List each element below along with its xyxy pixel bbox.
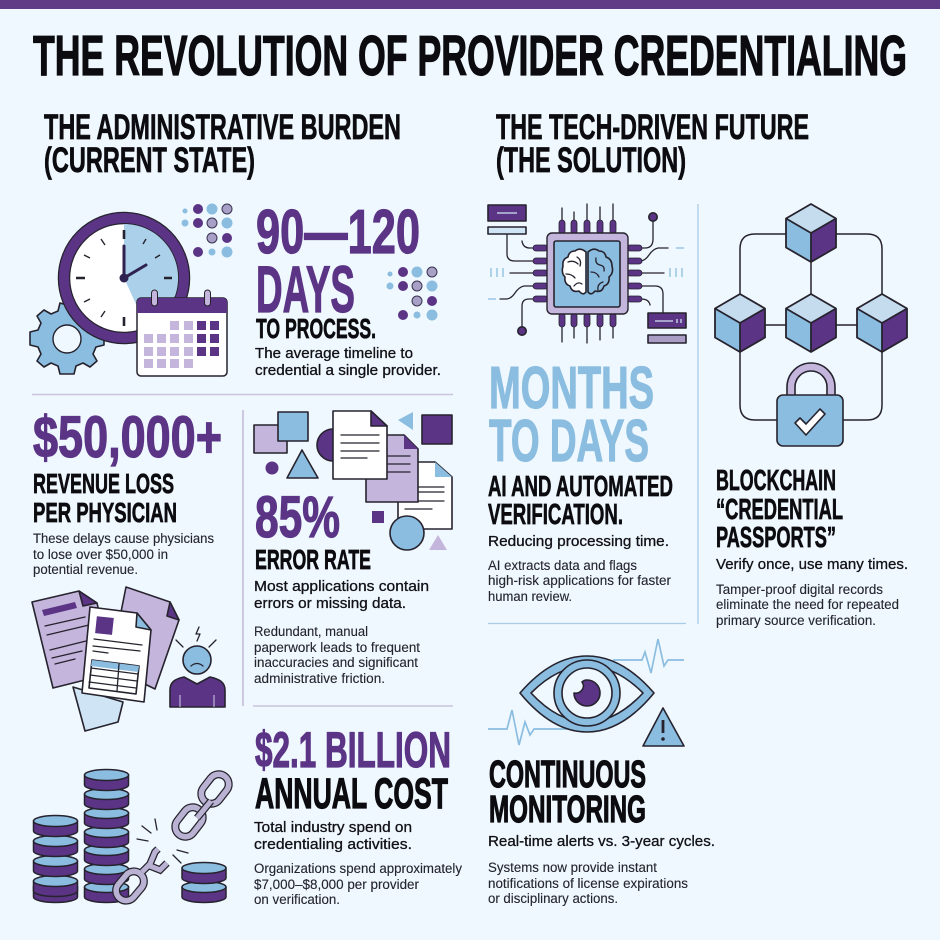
icon: AI chip with brain [488,204,686,343]
heading: the tech-driven future: (THE SOLUTION) [496,141,686,180]
stat: months to days [489,355,654,474]
stat: 90-120 days: TO PROCESS. [256,313,376,344]
top banner bar [0,0,940,9]
stat: $50,000+ revenue loss: REVENUE LOSS [33,468,174,499]
icon: dot cluster lower [386,266,438,320]
heading: the tech-driven future [496,108,809,180]
stat: 90-120 days: The average timeline to [255,346,413,362]
stat: 85% error rate: errors or missing data. [254,596,406,612]
heading: the administrative burden: THE ADMINISTRATIVE BURDEN [44,108,401,147]
text: AI and automated verification: VERIFICATION. [488,499,623,531]
brain [562,249,613,294]
text: AI and automated verification: high-risk applications for faster [488,573,671,588]
text: continuous monitoring: or disciplinary actions. [488,891,618,906]
stat: 85% error rate: inaccuracies and significant [254,655,418,670]
stat: 90-120 days: 90—120 [256,198,420,267]
icon: dot cluster upper [182,204,232,258]
icon: broken chain [112,770,233,905]
stat: $2.1 billion annual cost: ANNUAL COST [255,770,448,818]
text: AI and automated verification [488,471,673,604]
icon: clock with gear and calendar [30,218,227,376]
stat: $50,000+ revenue loss: to lose over $50,000 in [33,547,168,562]
icon: warning triangle [643,708,684,746]
stat: 85% error rate: Most applications contain [254,579,429,595]
text: continuous monitoring [488,754,715,906]
stat: 85% error rate: Redundant, manual [254,624,368,639]
icon: document and shapes collage [254,411,452,550]
heading: the administrative burden: (CURRENT STATE) [44,141,255,180]
icon: paper pile [32,587,179,731]
stat: 90-120 days: credential a single provider. [255,363,441,379]
stat: 85% error rate: paperwork leads to frequent [254,640,420,655]
stat: $2.1 billion annual cost: Organizations spend approximately [254,861,462,876]
text: blockchain credential passports: Tamper-proof digital records [716,582,883,597]
text: continuous monitoring: CONTINUOUS [489,754,646,796]
icon: padlock [777,363,843,446]
stat: $50,000+ revenue loss: potential revenue. [33,562,138,577]
cube right [857,294,907,352]
cube top [786,204,836,262]
text: AI and automated verification: Reducing processing time. [488,534,669,550]
stat: $2.1 billion annual cost: $7,000–$8,000 per provider [254,877,419,892]
stat: $2.1 billion annual cost: credentialing activities. [254,837,412,853]
text: blockchain credential passports: primary source verification. [716,613,876,628]
stat: 85% error rate: ERROR RATE [255,544,371,575]
text: blockchain credential passports: BLOCKCHAIN [716,465,836,497]
icon: monitoring eye with pulse lines and warning [488,639,684,746]
stat: 85% error rate [254,485,429,686]
stat: $2.1 billion annual cost: Total industry spend on [254,820,412,836]
icon: stressed person [170,627,225,707]
stat: $50,000+ revenue loss: $50,000+ [33,405,222,470]
stat: 85% error rate: administrative friction. [254,671,385,686]
text: continuous monitoring: notifications of license expirations [488,876,688,891]
chip pins [533,220,642,327]
heading: the administrative burden [44,108,401,180]
stat: $50,000+ revenue loss: These delays cause physicians [33,531,214,546]
stat: $50,000+ revenue loss: PER PHYSICIAN [33,497,177,528]
stat: $50,000+ revenue loss [33,405,222,577]
stat: $2.1 billion annual cost: $2.1 BILLION [255,722,451,778]
icon: calendar [137,290,227,376]
text: blockchain credential passports: eliminate the need for repeated [716,597,899,612]
text: blockchain credential passports: PASSPORTS” [716,522,836,554]
text: blockchain credential passports: “CREDENTIAL [716,494,843,526]
icon: clock [64,218,184,338]
chip boxes [488,205,526,221]
text: continuous monitoring: MONITORING [489,789,646,831]
text: AI and automated verification: human review. [488,589,572,604]
stat: 85% error rate: 85% [255,485,340,550]
icon: coin stacks with broken chain [34,770,233,905]
text: blockchain credential passports: Verify once, use many times. [716,557,908,573]
text: continuous monitoring: Systems now provide instant [488,860,657,875]
icon: coin stacks [34,770,226,902]
cube left [715,294,765,352]
text: AI and automated verification: AI AND AUTOMATED [488,471,673,503]
stat: $2.1 billion annual cost: on verification. [254,892,340,907]
stat: months to days: TO DAYS [489,408,649,474]
stat: $2.1 billion annual cost [254,722,462,907]
chip wires [500,204,668,343]
icon: gear [30,303,104,374]
icon: paper pile and stressed person [32,587,225,731]
cube middle [786,294,836,352]
stat: months to days: MONTHS [489,355,654,421]
text: AI and automated verification: AI extracts data and flags [488,558,637,573]
text: continuous monitoring: Real-time alerts vs. 3-year cycles. [488,834,715,850]
stat: 90-120 days: DAYS [256,252,355,326]
icon: blockchain network with padlock [715,204,907,446]
text: blockchain credential passports [716,465,908,628]
stat: 90-120 days [255,198,441,379]
